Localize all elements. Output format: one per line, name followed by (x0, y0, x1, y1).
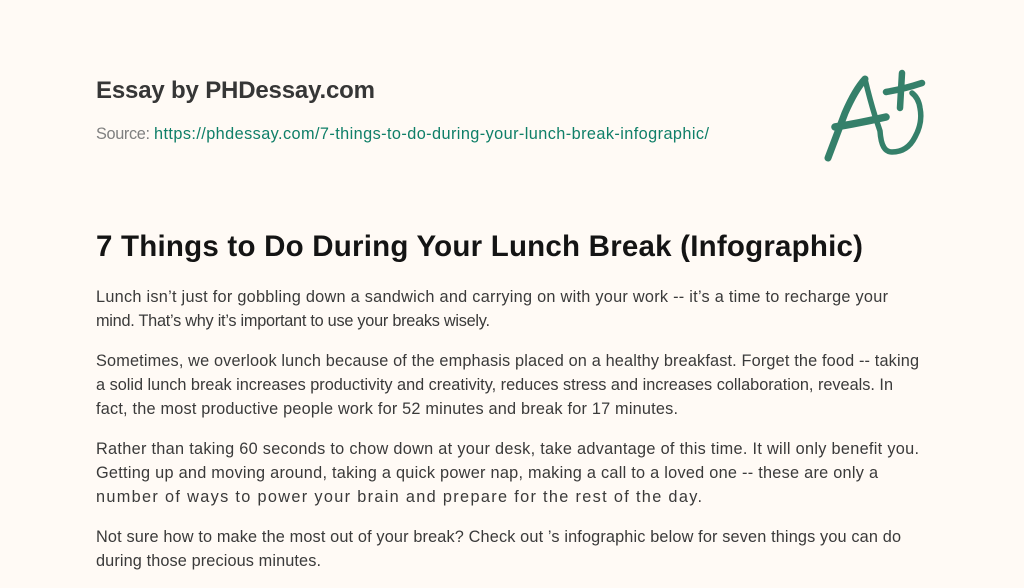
source line: https://phdessay.com/7-things-to-do-during-your-lunch-break-infographic/ (154, 125, 709, 143)
paragraph 3 (96, 440, 919, 506)
source line: Source: (96, 125, 150, 143)
paragraph 1: Lunch isn’t just for gobbling down a sandwich and carrying on with your work -- it’s a time to recharge your (96, 288, 889, 306)
article title: 7 Things to Do During Your Lunch Break (Infographic) (96, 230, 863, 263)
paragraph 2: Sometimes, we overlook lunch because of the emphasis placed on a healthy breakfast. Forget the food -- taking (96, 352, 919, 370)
paragraph 1: mind. That’s why it’s important to use your breaks wisely. (96, 312, 490, 330)
site heading: Essay by PHDessay.com (96, 77, 375, 104)
paragraph 4 (96, 528, 901, 570)
icon: A+ grade logo (828, 73, 922, 158)
paragraph 2 (96, 352, 919, 418)
paragraph 1 (96, 288, 889, 330)
paragraph 2: a solid lunch break increases productivity and creativity, reduces stress and increases collaboration, reveals. In (96, 376, 893, 394)
paragraph 3: Getting up and moving around, taking a quick power nap, making a call to a loved one -- these are only a (96, 464, 879, 482)
paragraph 2: fact, the most productive people work for 52 minutes and break for 17 minutes. (96, 400, 678, 418)
paragraph 4: Not sure how to make the most out of your break? Check out ’s infographic below for seven things you can do (96, 528, 901, 546)
paragraph 3: Rather than taking 60 seconds to chow down at your desk, take advantage of this time. It will only benefit you. (96, 440, 919, 458)
paragraph 3: number of ways to power your brain and prepare for the rest of the day. (96, 488, 702, 506)
paragraph 4: during those precious minutes. (96, 552, 321, 570)
